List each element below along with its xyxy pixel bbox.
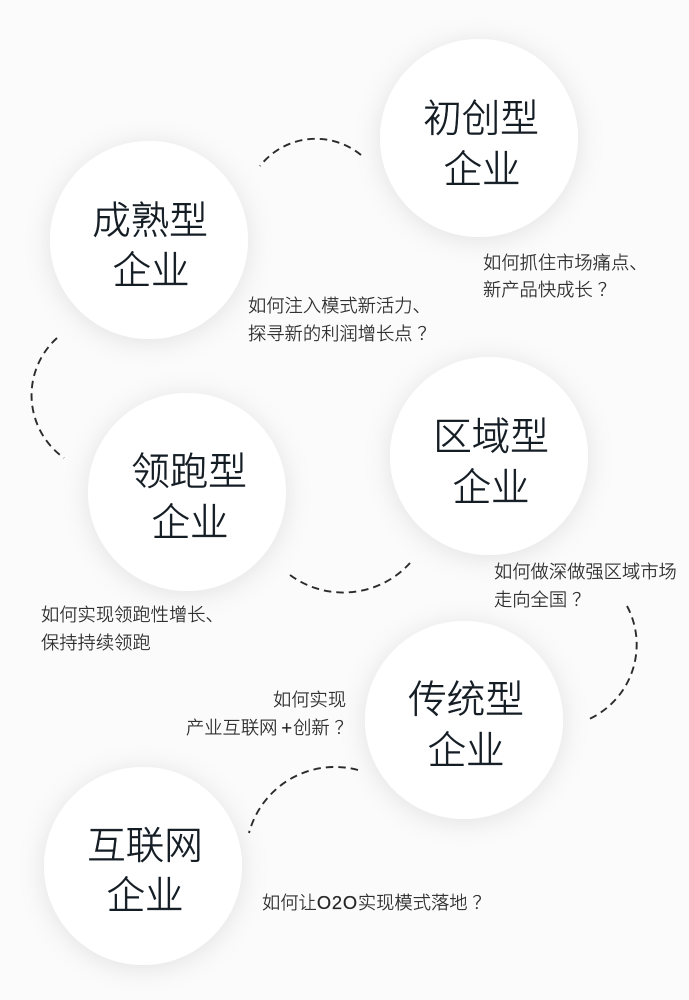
- text: 区域型 question: 如何做深做强区域市场: [494, 561, 677, 582]
- text: 领跑型 question: 保持持续领跑: [41, 632, 151, 653]
- text: 成熟型 question: [248, 295, 436, 344]
- circle: 成熟型企业: [50, 141, 248, 339]
- arrow: dashed arc from 初创型 to 成熟型: [260, 139, 361, 166]
- text: 初创型 question: 如何抓住市场痛点、: [483, 252, 648, 273]
- text: 成熟型 question: 如何注入模式新活力、: [248, 295, 431, 316]
- text: 区域型 question: [494, 561, 677, 610]
- circle: 传统型企业: 企业: [427, 730, 505, 773]
- circle: 成熟型企业: 企业: [112, 250, 190, 293]
- arrow: dashed arc from 传统型 to 互联网: [249, 767, 358, 833]
- arrow: dashed arc from 成熟型 to 领跑型: [32, 338, 64, 458]
- circle: 区域型企业: 企业: [452, 467, 530, 510]
- text: 互联网 question: 如何让O2O实现模式落地 ？: [262, 892, 491, 913]
- arrow: dashed arc from 区域型 to 传统型: [587, 606, 637, 720]
- text: 区域型 question: 走向全国 ？: [494, 589, 590, 610]
- text: 领跑型 question: [41, 604, 224, 653]
- text: 传统型 question: 如何实现: [273, 689, 346, 710]
- circle: 领跑型企业: [88, 393, 286, 591]
- circle: 领跑型企业: 领跑型: [131, 451, 247, 494]
- circle: 互联网企业: 企业: [106, 875, 184, 918]
- circle: 互联网企业: [44, 767, 242, 965]
- text: 初创型 question: 新产品快成长 ？: [483, 279, 616, 300]
- text: 初创型 question: [483, 252, 648, 300]
- circle: 传统型企业: [365, 621, 563, 819]
- arrow: dashed arc from 领跑型 to 区域型: [290, 563, 410, 593]
- circle: 初创型企业: 初创型: [423, 98, 539, 141]
- circle: 区域型企业: 区域型: [433, 416, 549, 459]
- text: 传统型 question: 产业互联网+创新 ？: [186, 717, 353, 738]
- circle: 成熟型企业: 成熟型: [92, 200, 208, 243]
- text: 领跑型 question: 如何实现领跑性增长、: [41, 604, 224, 625]
- circle: 领跑型企业: 企业: [151, 502, 229, 545]
- circle: 互联网企业: 互联网: [87, 825, 203, 868]
- circle: 初创型企业: 企业: [443, 149, 521, 192]
- text: 传统型 question: [186, 689, 353, 738]
- text: 成熟型 question: 探寻新的利润增长点 ？: [248, 323, 436, 344]
- circle: 初创型企业: [380, 39, 578, 237]
- circle: 传统型企业: 传统型: [408, 679, 524, 722]
- circle: 区域型企业: [390, 357, 588, 555]
